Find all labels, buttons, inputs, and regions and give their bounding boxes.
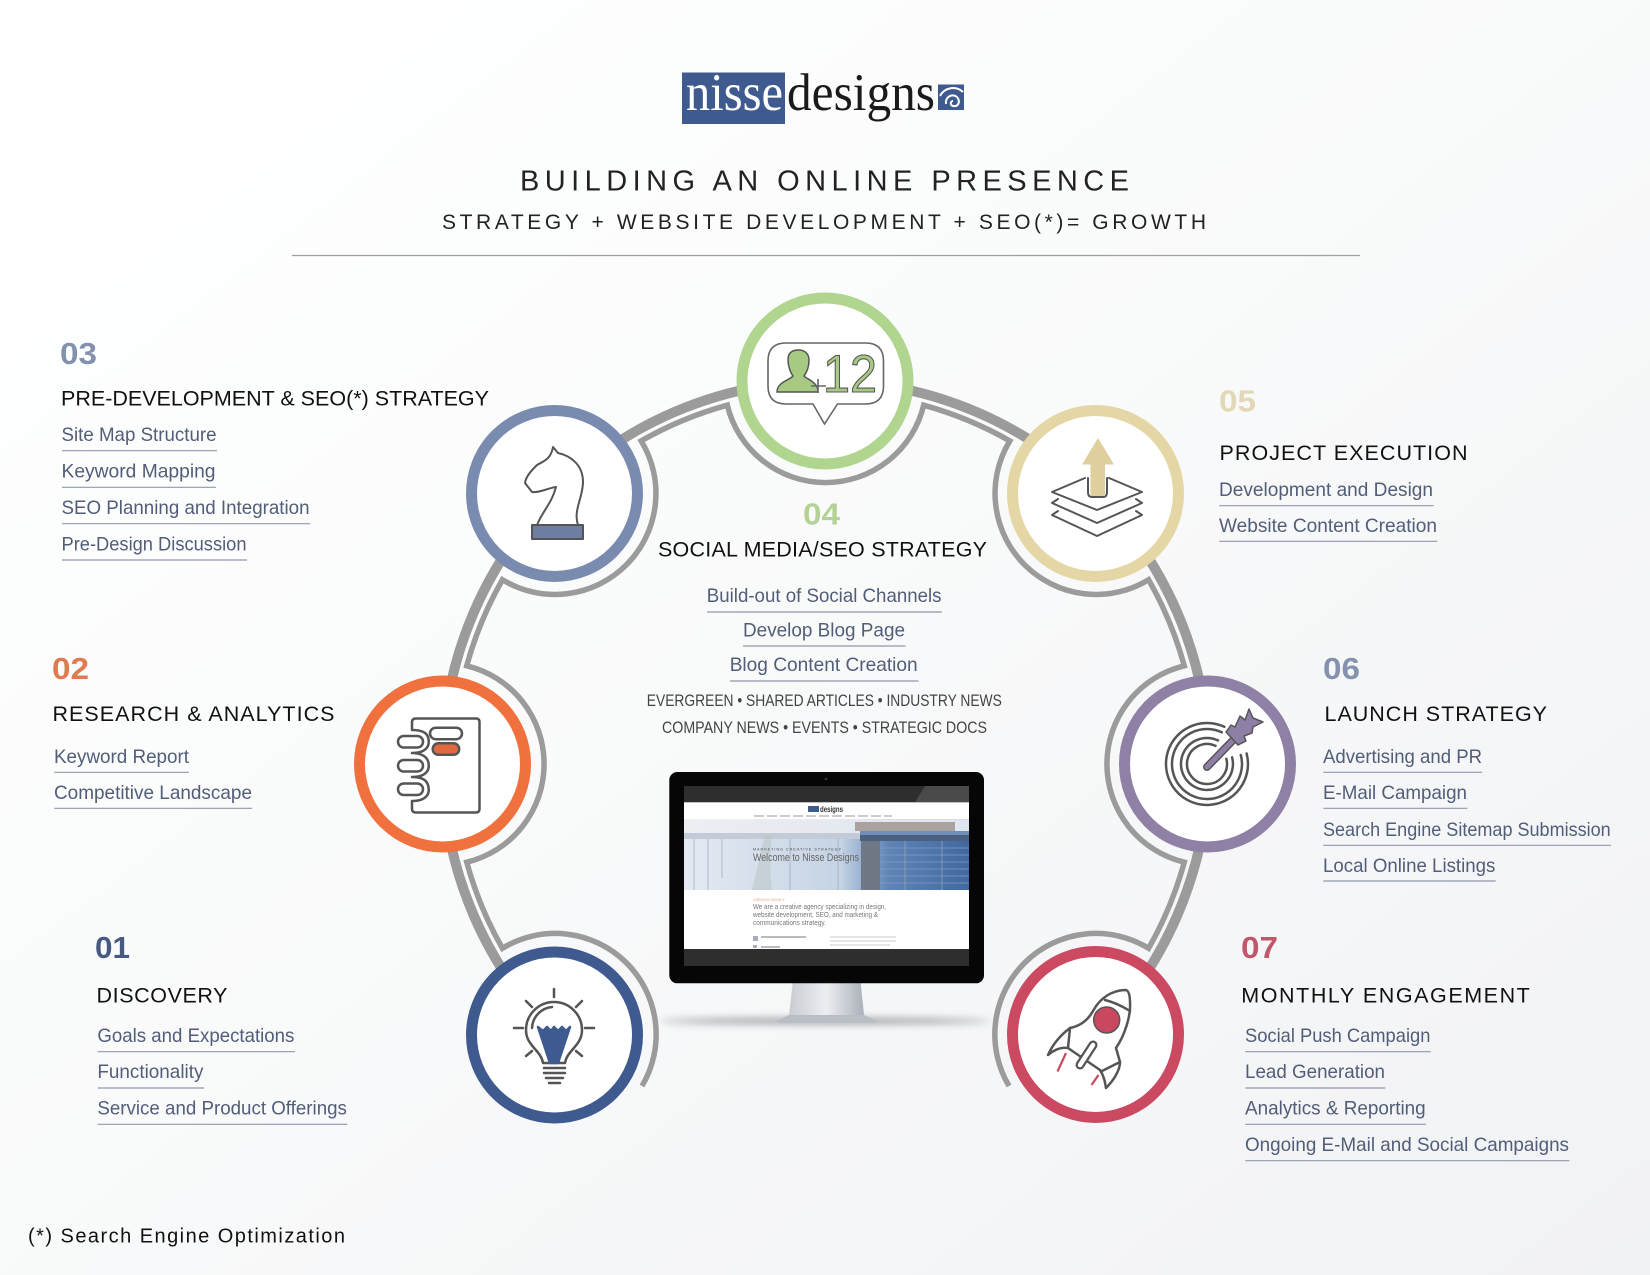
- list 06: Advertising and PR: [1323, 746, 1482, 768]
- list 02: [54, 746, 252, 808]
- subtitle: STRATEGY + WEBSITE DEVELOPMENT + SEO(*)= GROWTH: [442, 211, 1206, 234]
- content types: EVERGREEN • SHARED ARTICLES • INDUSTRY NEWS: [647, 692, 1002, 710]
- icon: target with arrow: [1166, 709, 1263, 805]
- node 06: target: [1124, 681, 1290, 847]
- list 06: [1323, 746, 1611, 881]
- monitor screen: website: Welcome to Nisse Designs: [753, 852, 859, 864]
- list 07: Ongoing E-Mail and Social Campaigns: [1245, 1134, 1569, 1156]
- icon: chess knight: [525, 447, 583, 539]
- list 04: Blog Content Creation: [730, 654, 918, 676]
- heading 01: DISCOVERY: [96, 984, 228, 1008]
- number 01: 01: [95, 930, 130, 965]
- icon: upload stack: [1052, 438, 1142, 536]
- monitor screen: website: MARKETING CREATIVE STRATEGY: [753, 848, 842, 852]
- number 04: 04: [803, 496, 841, 531]
- panel: step 06: [1323, 651, 1611, 881]
- monitor screen: website: We are a creative agency specializing in design,: [753, 902, 886, 911]
- list 07: Social Push Campaign: [1245, 1025, 1430, 1047]
- monitor screen: website: designs: [820, 805, 843, 814]
- icon: social badge: 12: [823, 345, 877, 404]
- list 01: Functionality: [97, 1061, 204, 1083]
- list 03: Keyword Mapping: [62, 460, 216, 482]
- number 05: 05: [1219, 384, 1256, 419]
- panel: step 04: [647, 496, 1002, 737]
- icon: social badge: [768, 343, 884, 424]
- list 03: SEO Planning and Integration: [62, 497, 310, 519]
- list 06: Search Engine Sitemap Submission: [1323, 819, 1611, 841]
- list 01: Service and Product Offerings: [97, 1098, 347, 1120]
- list 02: Keyword Report: [54, 746, 190, 768]
- heading 06: LAUNCH STRATEGY: [1324, 702, 1547, 726]
- icon: lightbulb: [514, 989, 594, 1083]
- list 05: Website Content Creation: [1219, 515, 1437, 537]
- node 07: rocket: [1012, 952, 1178, 1118]
- thin inner scalloped path: [467, 405, 1184, 1086]
- monitor mockup: [660, 772, 990, 1024]
- list 02: Competitive Landscape: [54, 782, 252, 804]
- node 04: social badge: [742, 298, 908, 464]
- content types: [647, 692, 1002, 737]
- list 01: [97, 1025, 347, 1124]
- heading 07: MONTHLY ENGAGEMENT: [1241, 984, 1530, 1008]
- node 02: notebook: [360, 681, 526, 847]
- list 03: [62, 424, 310, 560]
- list 05: Development and Design: [1219, 479, 1433, 501]
- logo: nisse: [686, 64, 783, 122]
- panel: step 03: [60, 336, 489, 560]
- node 01: lightbulb: [472, 952, 638, 1118]
- list 06: E-Mail Campaign: [1323, 782, 1467, 804]
- node 03: chess knight: [472, 410, 638, 576]
- icon: notebook: [398, 718, 480, 812]
- number 06: 06: [1323, 651, 1360, 686]
- list 01: Goals and Expectations: [97, 1025, 295, 1047]
- heading 05: PROJECT EXECUTION: [1220, 441, 1468, 465]
- list 07: Analytics & Reporting: [1245, 1098, 1426, 1120]
- logo: designs: [787, 64, 935, 122]
- list 04: Develop Blog Page: [743, 620, 905, 642]
- monitor stand: [777, 983, 877, 1023]
- title: BUILDING AN ONLINE PRESENCE: [520, 166, 1129, 198]
- heading 03: PRE-DEVELOPMENT & SEO(*) STRATEGY: [61, 387, 489, 411]
- panel: step 02: [52, 651, 334, 808]
- panel: step 01: [95, 930, 347, 1124]
- panel: step 07: [1241, 930, 1569, 1161]
- number 02: 02: [52, 651, 89, 686]
- number 03: 03: [60, 336, 97, 371]
- number 07: 07: [1241, 930, 1278, 965]
- list 04: Build-out of Social Channels: [707, 585, 942, 607]
- node 05: upload stack: [1012, 410, 1178, 576]
- footnote: (*) Search Engine Optimization: [28, 1226, 345, 1248]
- panel: step 05: [1219, 384, 1468, 541]
- monitor screen: website: [684, 786, 969, 966]
- icon: rocket: [1048, 990, 1130, 1088]
- monitor screen: website: communications strategy.: [753, 918, 826, 927]
- list 05: [1219, 479, 1437, 541]
- list 03: Site Map Structure: [62, 424, 216, 446]
- content types: COMPANY NEWS • EVENTS • STRATEGIC DOCS: [662, 719, 987, 737]
- heading 04: SOCIAL MEDIA/SEO STRATEGY: [658, 538, 987, 562]
- monitor screen: website: website development, SEO, and marketing &: [752, 910, 878, 919]
- list 03: Pre-Design Discussion: [62, 534, 246, 556]
- list 07: Lead Generation: [1245, 1061, 1385, 1083]
- thick outer ring path: [442, 381, 1208, 1035]
- heading 02: RESEARCH & ANALYTICS: [52, 702, 334, 726]
- monitor screen: website: CREATIVE AGENCY: [753, 898, 786, 902]
- list 06: Local Online Listings: [1323, 855, 1496, 877]
- logo: [682, 64, 964, 124]
- list 04: [707, 585, 942, 681]
- list 07: [1245, 1025, 1569, 1161]
